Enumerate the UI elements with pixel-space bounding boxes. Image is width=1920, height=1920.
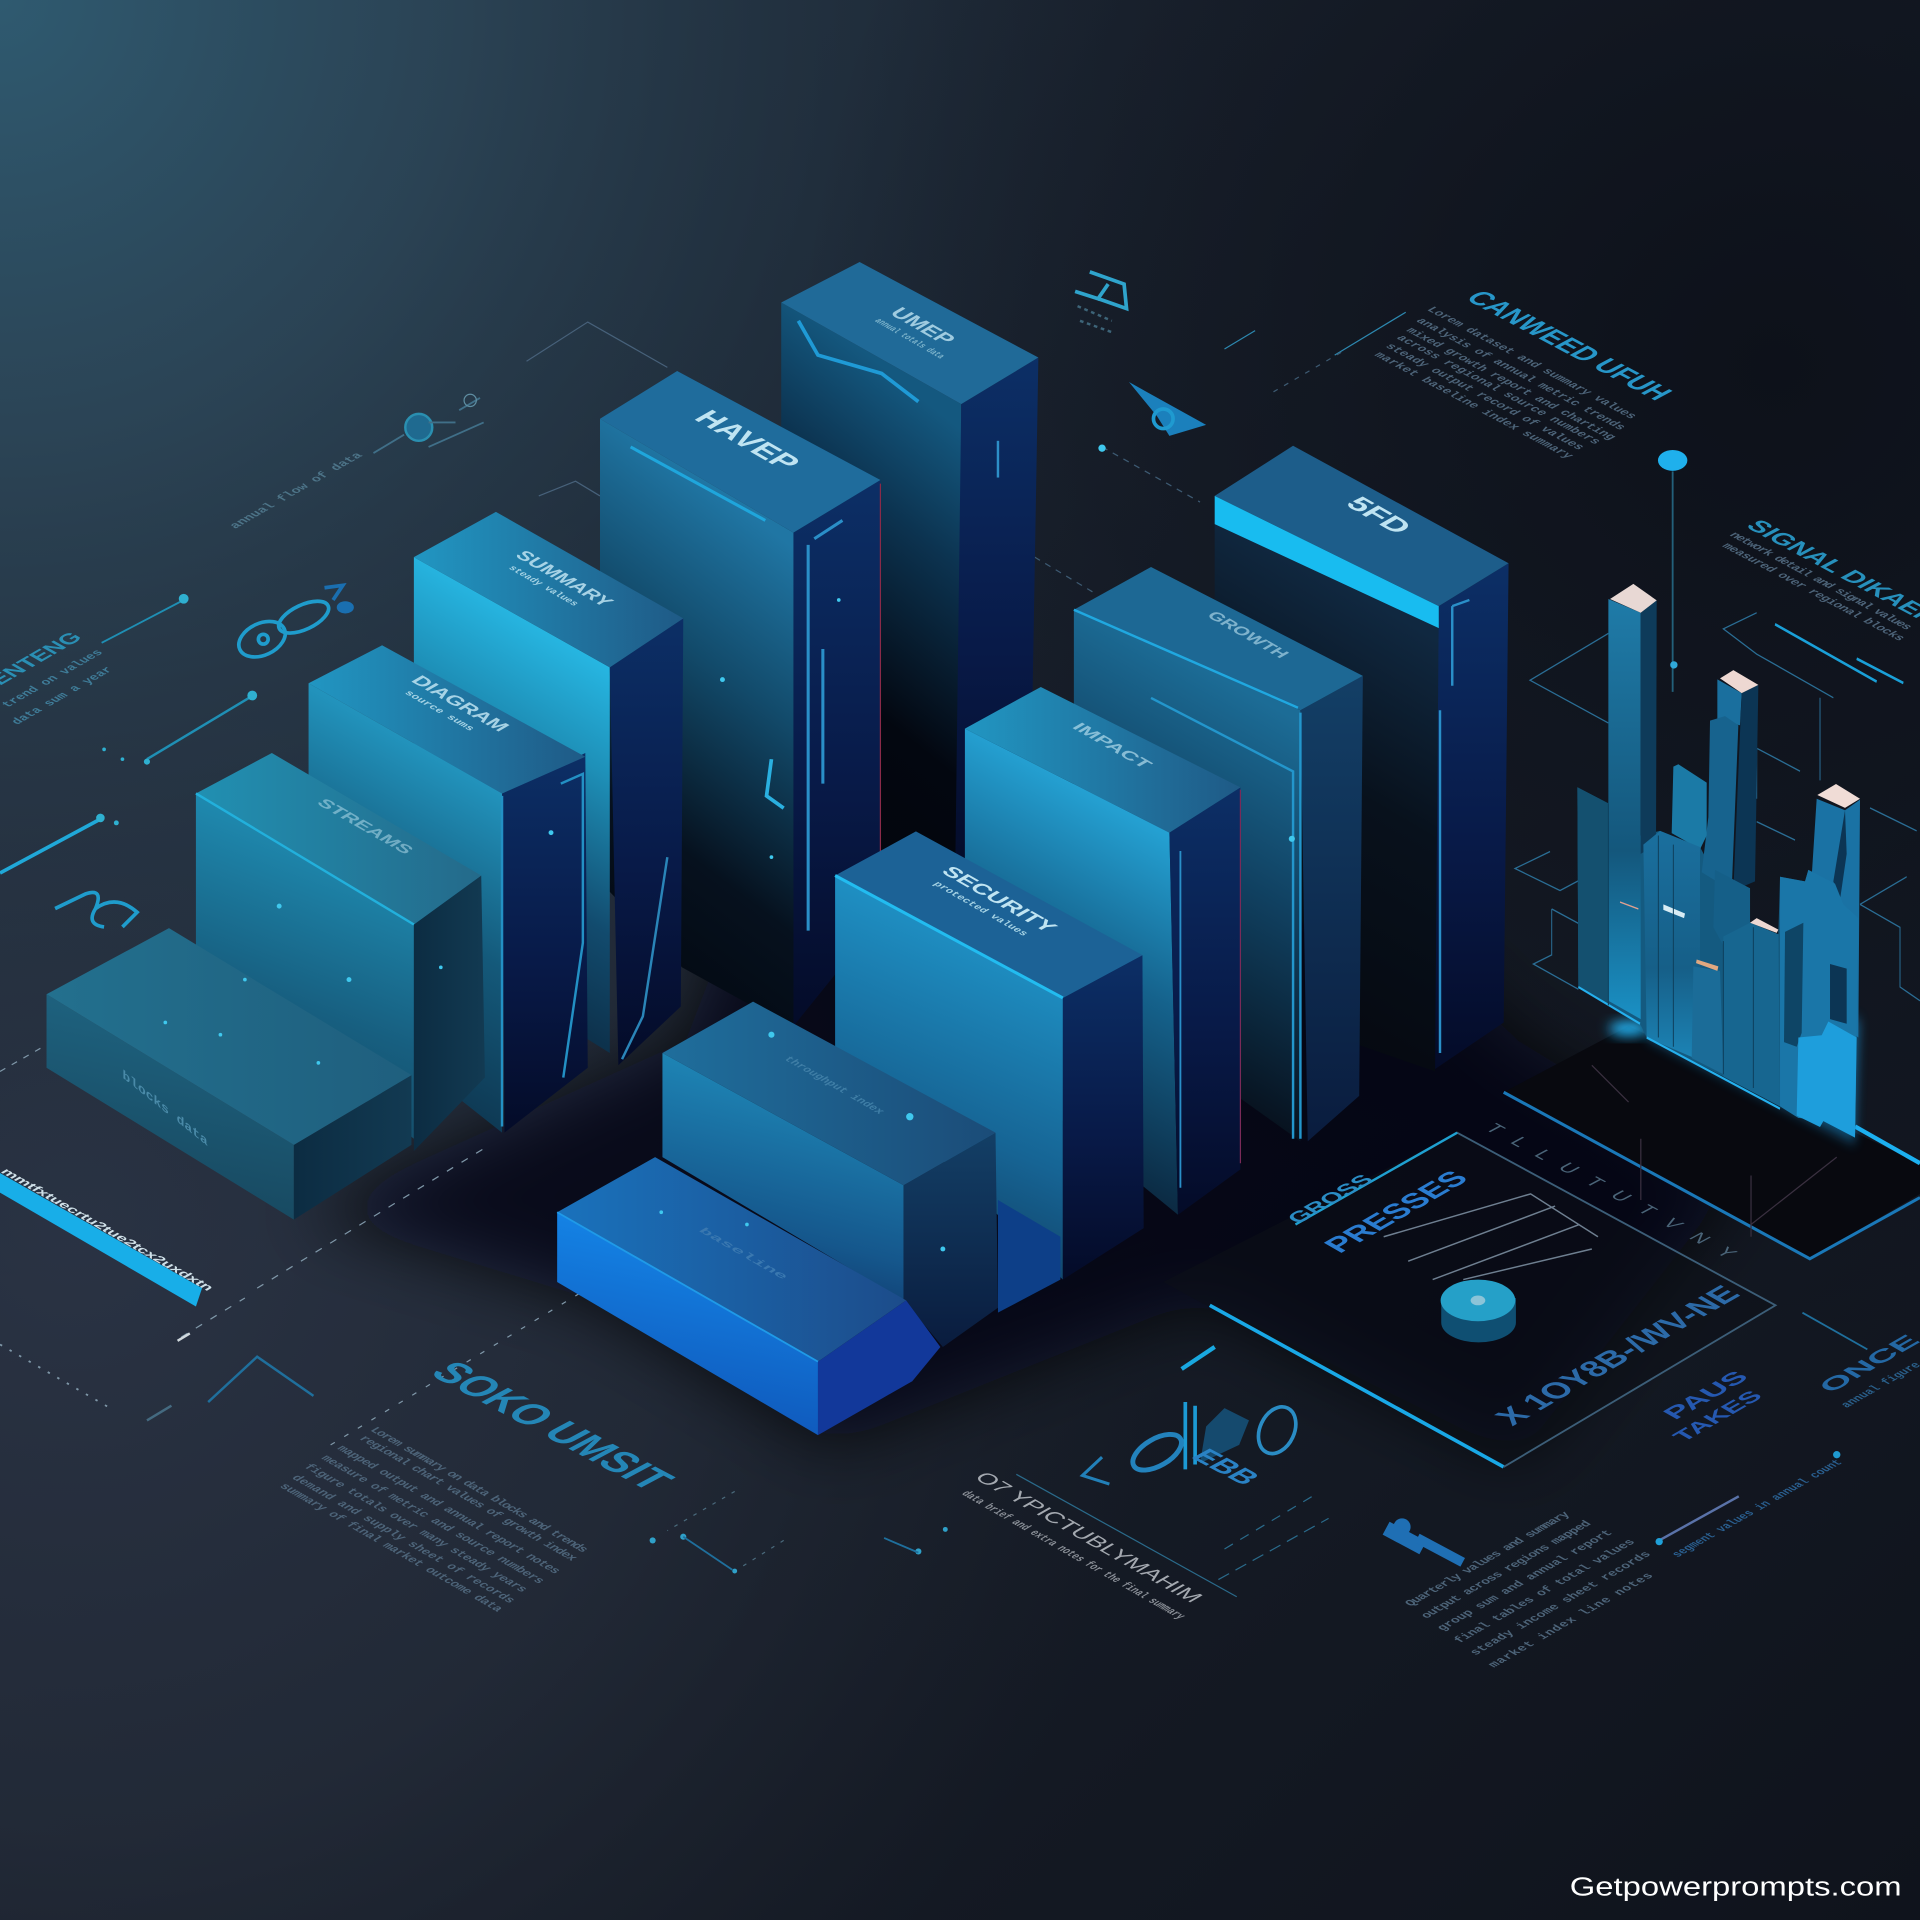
panel list: GROSS: [1282, 1171, 1379, 1227]
box I: [965, 687, 1240, 1215]
box A label: annual totals data: [872, 317, 947, 360]
sparkle dots on blocks: [163, 444, 1295, 1251]
box B: [600, 371, 880, 1029]
box A: tallest back block: [781, 262, 1038, 906]
pointer bottom left: [147, 1357, 313, 1420]
body text: top right: mixed growth report and charting: [1402, 326, 1619, 442]
chart base mass: [1577, 584, 1860, 1138]
box D label: source sums: [401, 689, 477, 733]
body text: bottom left: regional chart values of growth index: [355, 1434, 581, 1564]
ground shadows: [306, 759, 1739, 1457]
body text: bottom right: market index line notes: [1485, 1571, 1657, 1670]
box B label: HAVEP: [687, 406, 807, 475]
caption: bottom centre: data brief and extra notes for the final summary: [958, 1489, 1189, 1622]
body text: bottom left: measure of metric and source numbers: [317, 1453, 548, 1586]
icon group: bottom centre logo: [1082, 1347, 1303, 1489]
floor connector lines: [0, 312, 1406, 1445]
box F label: blocks data: [122, 1067, 208, 1150]
body text: bottom left: [276, 1425, 592, 1614]
box J: [835, 831, 1144, 1280]
box K label: throughput index: [780, 1055, 887, 1116]
body text: bottom right: group sum and annual report: [1434, 1528, 1616, 1633]
body text: top right: market baseline index summary: [1370, 350, 1577, 461]
icon: magnifier and label top left: [226, 394, 484, 531]
chart base mass glow: [1647, 996, 1860, 1143]
caption: bottom centre: O7 YPICTUBLYMAHIM: [969, 1469, 1207, 1606]
body text: top right: [1370, 305, 1640, 461]
box J label: [930, 863, 1062, 938]
panel bottom text: X 1OY8B-/WV-NE: [1487, 1280, 1747, 1430]
box H: [1074, 567, 1363, 1141]
pointer lines left: [0, 594, 257, 873]
body text: bottom left: demand and supply sheet of records: [288, 1473, 518, 1605]
box D: [309, 645, 588, 1133]
box G label: 5FD: [1339, 493, 1419, 538]
icon: blob left: [233, 585, 354, 664]
body text: bottom right: output across regions mapped: [1418, 1519, 1595, 1621]
blue label bottom right: PAUS: [1657, 1367, 1754, 1423]
body text: bottom left: mapped output and annual report notes: [333, 1444, 564, 1576]
watermark: Getpowerprompts.com: [1570, 1874, 1902, 1902]
platform glow: [1609, 1021, 1648, 1036]
body text: bottom right: [1402, 1509, 1657, 1670]
progress bar with caption: [0, 1166, 217, 1307]
dots bottom centre: [650, 1491, 948, 1573]
box L front blue: [557, 1157, 940, 1435]
body text: top right: across regional source numbers: [1392, 333, 1604, 446]
label at right edge: [1812, 1331, 1920, 1410]
heading: bottom left: SOKO UMSIT: [420, 1356, 684, 1497]
panel list: PRESSES: [1317, 1166, 1476, 1257]
pointer and text bottom right: segment values in annual count: [1669, 1458, 1846, 1560]
blue label bottom right: [1657, 1367, 1768, 1445]
label block left: upper: [0, 629, 116, 727]
pointer and text bottom right: [1656, 1313, 1867, 1560]
progress bar with caption: mmtfxtuecrtu2tue2tcx2uxdxtn: [0, 1166, 217, 1293]
dashed detail frame: [1016, 1474, 1329, 1597]
box J label: protected values: [930, 880, 1031, 938]
body text: top right: Lorem dataset and summary values: [1423, 305, 1640, 421]
icon: pennant top: [1075, 272, 1127, 333]
icon: bow shape: [1129, 382, 1206, 436]
box L label: baseline: [694, 1227, 791, 1282]
heading and body: right: network detail and signal values: [1725, 530, 1916, 632]
small connector block: [998, 1200, 1060, 1313]
floor panel: [1163, 1121, 1776, 1467]
icon group: bottom centre logo: EBB: [1184, 1445, 1267, 1489]
body text: bottom left: summary of final market outcome data: [276, 1482, 507, 1614]
caption: bottom centre: [958, 1469, 1207, 1622]
icon: squiggle left: [55, 892, 137, 927]
label at right edge: ONCE: [1812, 1331, 1920, 1396]
body text: top right: steady output record of values: [1381, 342, 1588, 452]
body text: bottom left: Lorem summary on data blocks and trends: [366, 1425, 592, 1555]
heading and body: right: measured over regional blocks: [1718, 541, 1908, 643]
label block left: upper: data sum a year: [8, 665, 116, 727]
label block left: upper: trend on values: [0, 648, 107, 710]
box E label: STREAMS: [312, 797, 417, 857]
disc token: [1441, 1280, 1516, 1342]
hologram bar chart: [1515, 584, 1920, 1143]
panel edge text: T L L U T U T V N Y: [1480, 1121, 1742, 1261]
box J label: SECURITY: [936, 863, 1062, 936]
box K: [662, 1002, 998, 1347]
panel list: [1282, 1166, 1598, 1280]
box I label: IMPACT: [1068, 721, 1155, 771]
box D label: DIAGRAM: [407, 672, 514, 734]
box G back right: [1215, 446, 1509, 1071]
box C: [414, 512, 683, 1065]
label: annual flow of data: [226, 450, 367, 531]
box C label: steady values: [506, 564, 581, 608]
chart platform: [1504, 1021, 1920, 1259]
body text: bottom left: figure totals over many steady years: [300, 1462, 531, 1594]
box H label: GROWTH: [1203, 609, 1292, 661]
pin marker with stem: [1658, 450, 1687, 692]
body text: bottom right: steady income sheet records: [1467, 1550, 1655, 1658]
box F lowest left step: [47, 928, 411, 1220]
icon: people cluster: [1383, 1518, 1465, 1567]
body text: bottom right: Quarterly values and summary: [1402, 1509, 1574, 1609]
blue label bottom right: TAKES: [1668, 1388, 1768, 1445]
box A label: UMEP: [885, 305, 960, 348]
box E: [196, 753, 485, 1151]
box A label: [872, 305, 960, 360]
body text: top right: analysis of annual metric trends: [1412, 316, 1629, 432]
body text: bottom right: final tables of total values: [1451, 1537, 1639, 1645]
box C label: SUMMARY: [511, 547, 619, 609]
heading: top right: CANWEED UFUH: [1458, 287, 1679, 405]
